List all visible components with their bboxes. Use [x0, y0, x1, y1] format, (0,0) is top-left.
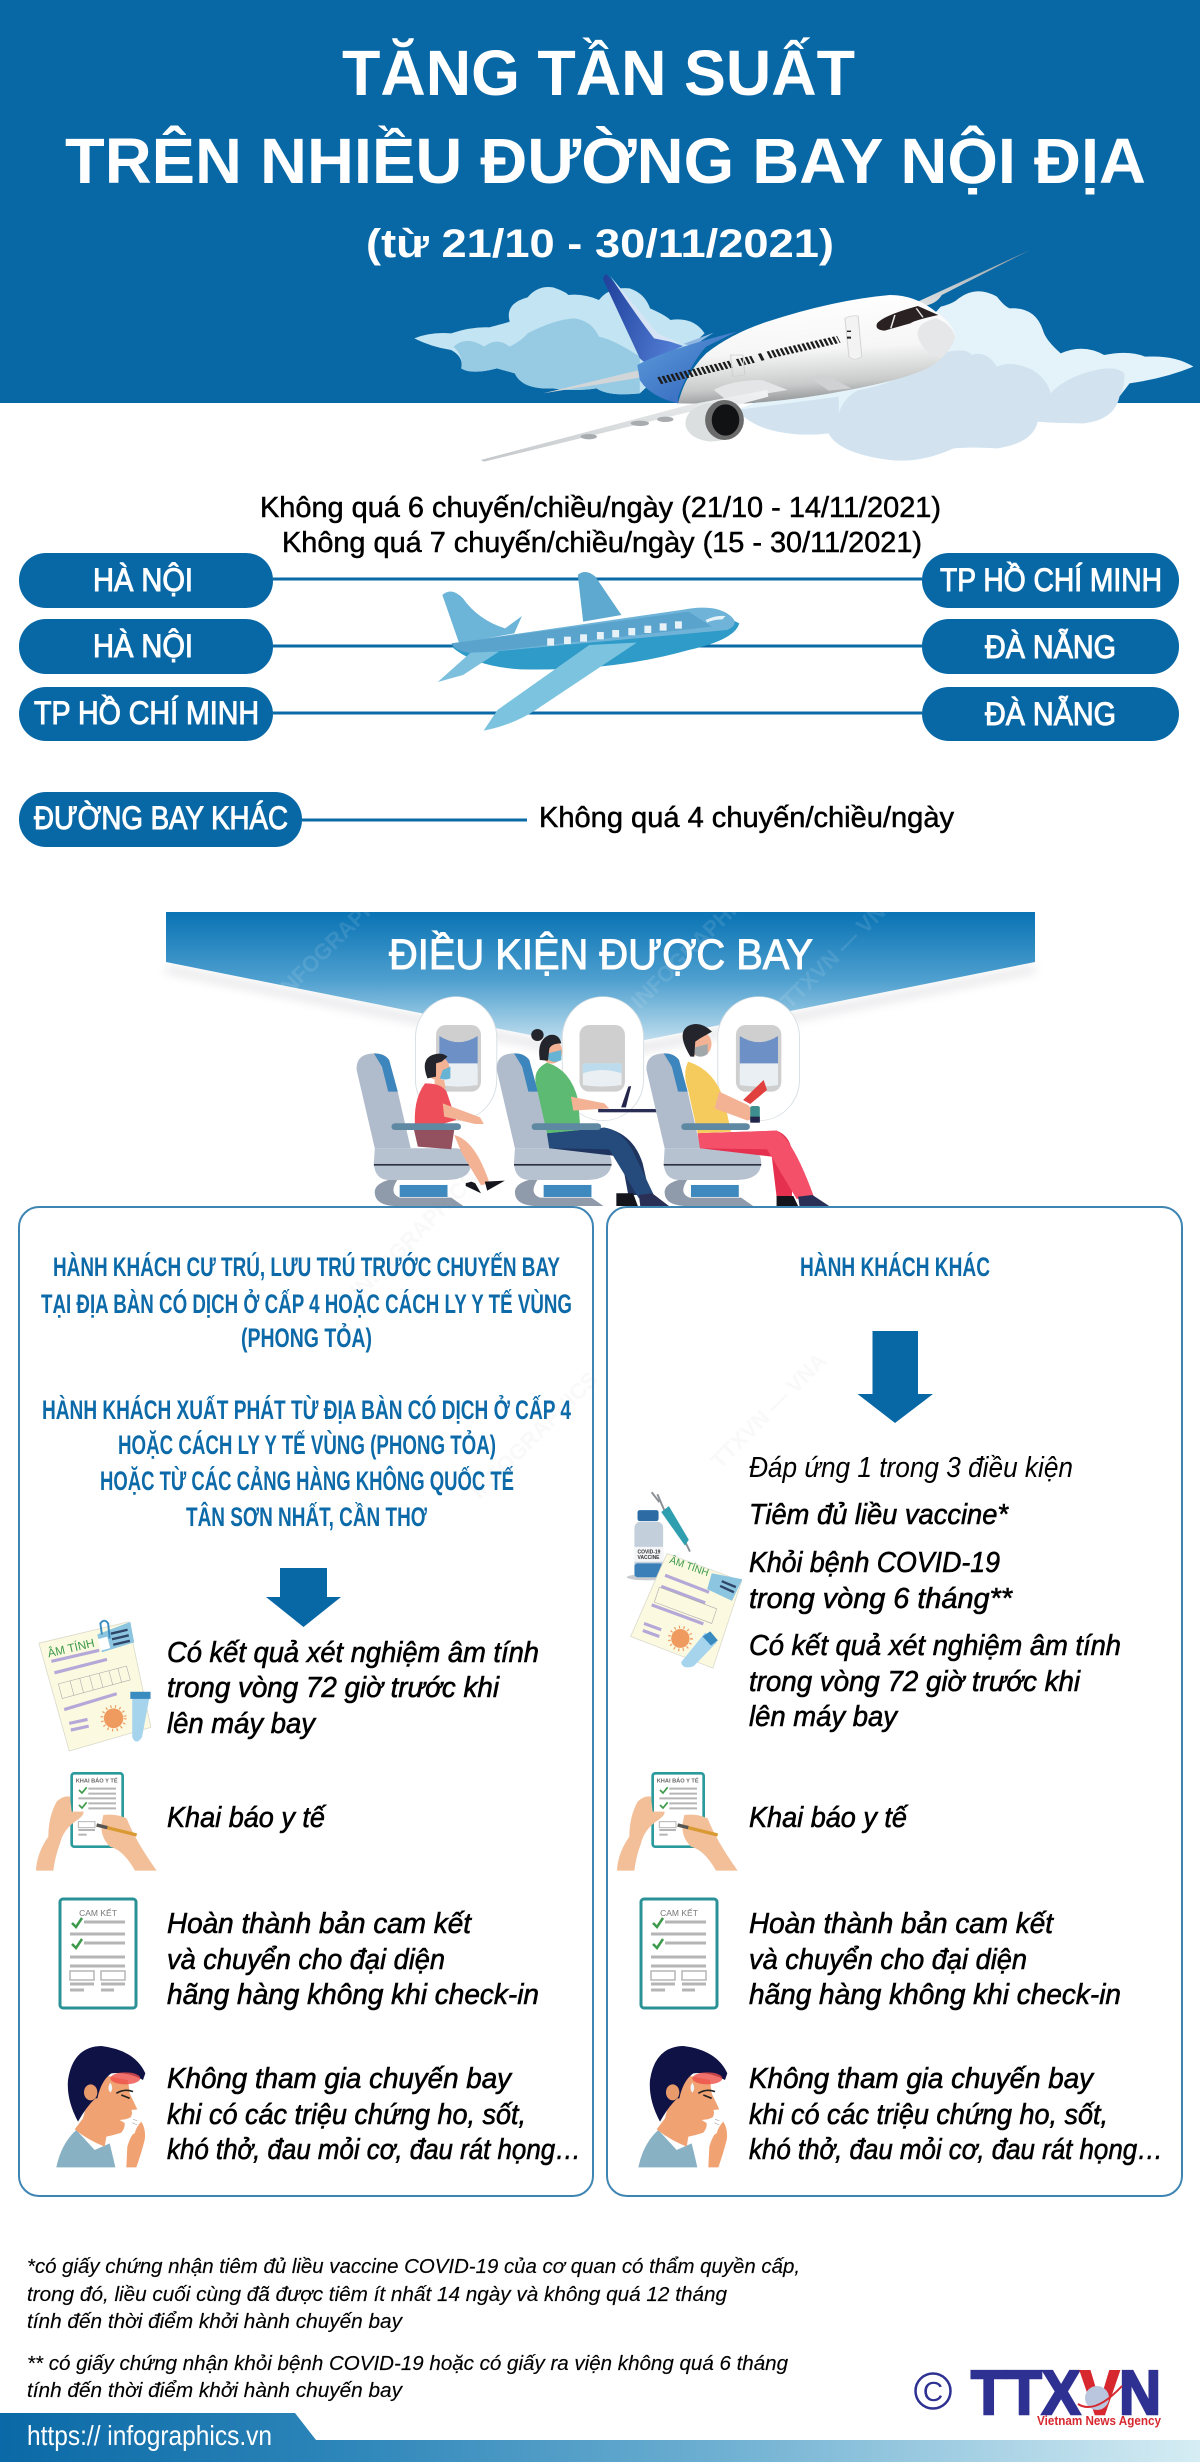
logo: TTXVN: TTXVN [971, 2359, 1161, 2428]
text: health declaration (left): Khai báo y tế [167, 1802, 327, 1834]
seat 2 and woman [497, 1029, 669, 1206]
footnotes: tính đến thời điểm khởi hành chuyến bay [27, 2310, 404, 2333]
left panel heading: HOẶC TỪ CÁC CẢNG HÀNG KHÔNG QUỐC TẾ [100, 1464, 514, 1496]
footnotes: trong đó, liều cuối cùng đã được tiêm ít nhất 14 ngày và không quá 12 tháng [27, 2283, 728, 2306]
windows [415, 997, 800, 1121]
route pills left: TP HỒ CHÍ MINH [34, 695, 259, 731]
footer band [0, 2413, 1200, 2462]
text: three conditions (right): trong vòng 6 tháng** [749, 1583, 1014, 1615]
route pills right: ĐÀ NẴNG [985, 629, 1116, 665]
route pills left: HÀ NỘI [93, 628, 193, 664]
text: commitment (left): Hoàn thành bản cam kết [167, 1908, 473, 1940]
text: health declaration (right): Khai báo y tế [749, 1802, 909, 1834]
footnotes: ** có giấy chứng nhận khỏi bệnh COVID-19 hoặc có giấy ra viện không quá 6 tháng [27, 2352, 789, 2375]
arrow: right panel [858, 1331, 933, 1423]
title: TRÊN NHIỀU ĐƯỜNG BAY NỘI ĐỊA [65, 124, 1146, 197]
left panel heading: TÂN SƠN NHẤT, CẦN THƠ [186, 1501, 427, 1532]
watermarks: TTXVN — VNA [776, 888, 902, 1014]
text: commitment (right) [749, 1908, 1121, 2011]
seat 3 and man [646, 1024, 829, 1206]
icon: main airplane [481, 250, 1030, 462]
text: symptoms (left) [167, 2063, 581, 2166]
panel watermarks [346, 1167, 832, 1504]
icon: commitment form (right) [641, 1899, 717, 2008]
watermarks: INFOGRAPHICS [626, 877, 763, 1014]
route pills right: ĐÀ NẴNG [985, 696, 1116, 732]
route pills left [19, 553, 273, 741]
left panel heading [41, 1251, 572, 1532]
text: commitment (left): và chuyển cho đại diện [167, 1944, 445, 1976]
text: three conditions (right): Đáp ứng 1 trong 3 điều kiện [749, 1452, 1073, 1484]
text: negative test (left): lên máy bay [167, 1708, 316, 1740]
route frequency text: Không quá 7 chuyến/chiều/ngày (15 - 30/11/2021) [282, 527, 922, 559]
text: negative test (left): trong vòng 72 giờ trước khi [167, 1672, 500, 1704]
banner: flight conditions [166, 912, 1035, 1049]
text: commitment (right): và chuyển cho đại diện [749, 1944, 1027, 1976]
left panel heading: HÀNH KHÁCH CƯ TRÚ, LƯU TRÚ TRƯỚC CHUYẾN BAY [53, 1251, 560, 1282]
logo: TTXVN: C [923, 2376, 943, 2407]
illustration: passengers in seats [357, 997, 829, 1206]
text: symptoms (left): khó thở, đau mỏi cơ, đau rát họng… [167, 2134, 581, 2166]
header band [0, 0, 1200, 403]
route pills right: TP HỒ CHÍ MINH [940, 562, 1162, 598]
icon: health declaration (left): KHAI BÁO Y TẾ [76, 1778, 118, 1785]
text: symptoms (left): Không tham gia chuyến bay [167, 2063, 512, 2095]
footnotes [27, 2255, 800, 2402]
other routes pill [19, 792, 302, 847]
panel watermarks: INFOGRAPHICS [466, 1367, 603, 1504]
left panel heading: (PHONG TỎA) [241, 1321, 372, 1353]
icon: coughing man (left) [56, 2046, 145, 2167]
right panel heading: HÀNH KHÁCH KHÁC [800, 1251, 990, 1282]
text: three conditions (right) [749, 1452, 1121, 1733]
icon: coughing man (right) [638, 2046, 727, 2167]
text: commitment (left): hãng hàng không khi check-in [167, 1979, 539, 2011]
watermarks [271, 867, 902, 1014]
panel watermarks: INFOGRAPHICS [346, 1167, 483, 1304]
watermarks: INFOGRAPHICS [271, 867, 408, 1004]
icon: vaccine and test document (right): VACCINE [638, 1555, 660, 1561]
clouds behind plane [414, 287, 1193, 461]
arrow: left panel [266, 1568, 341, 1627]
logo: TTXVN: Vietnam News Agency [1037, 2414, 1161, 2428]
other routes connector [302, 818, 527, 822]
text: three conditions (right): Tiêm đủ liều vaccine* [749, 1499, 1010, 1531]
panel watermarks: TTXVN — VNA [706, 1348, 832, 1474]
icon: health declaration (right) [617, 1773, 738, 1871]
text: symptoms (right) [749, 2063, 1163, 2166]
text: three conditions (right): Có kết quả xét nghiệm âm tính [749, 1630, 1121, 1662]
text: commitment (right): hãng hàng không khi check-in [749, 1979, 1121, 2011]
route pills right [922, 553, 1179, 741]
left panel heading: TẠI ĐỊA BÀN CÓ DỊCH Ở CẤP 4 HOẶC CÁCH LY Y TẾ VÙNG [41, 1287, 572, 1319]
icon: negative test document (left) [39, 1621, 151, 1751]
text: negative test (left): Có kết quả xét nghiệm âm tính [167, 1637, 539, 1669]
text: commitment (right): Hoàn thành bản cam kết [749, 1908, 1055, 1940]
route frequency text: Không quá 6 chuyến/chiều/ngày (21/10 - 14/11/2021) [260, 492, 941, 524]
text: symptoms (right): Không tham gia chuyến bay [749, 2063, 1094, 2095]
title [65, 37, 1146, 266]
icon: health declaration (left) [36, 1773, 157, 1871]
icon: commitment form (left): CAM KẾT [79, 1908, 117, 1918]
text: commitment (left) [167, 1908, 539, 2011]
text: symptoms (right): khi có các triệu chứng ho, sốt, [749, 2099, 1108, 2131]
icon: small blue airplane [438, 572, 739, 731]
text: symptoms (left): khi có các triệu chứng ho, sốt, [167, 2099, 526, 2131]
icon: health declaration (right): KHAI BÁO Y TẾ [657, 1778, 699, 1785]
title: (từ 21/10 - 30/11/2021) [366, 222, 834, 266]
other routes limit text: Không quá 4 chuyến/chiều/ngày [539, 802, 955, 834]
left panel heading: HOẶC CÁCH LY Y TẾ VÙNG (PHONG TỎA) [118, 1428, 496, 1460]
text: three conditions (right): Khỏi bệnh COVID-19 [749, 1547, 1000, 1579]
text: three conditions (right): trong vòng 72 giờ trước khi [749, 1666, 1081, 1698]
icon: commitment form (left) [60, 1899, 136, 2008]
route connector lines [273, 579, 922, 713]
seat 1 and child [357, 1053, 505, 1206]
footnotes: *có giấy chứng nhận tiêm đủ liều vaccine COVID-19 của cơ quan có thẩm quyền cấp, [27, 2255, 800, 2278]
footnotes: tính đến thời điểm khởi hành chuyến bay [27, 2379, 404, 2402]
icon: vaccine and test document (right) [627, 1492, 742, 1668]
icon: negative test document (left): ÂM TÍNH [46, 1637, 96, 1660]
footer url: https:// infographics.vn [27, 2420, 272, 2451]
banner shadow [166, 966, 1035, 1060]
icon: commitment form (right): CAM KẾT [660, 1908, 698, 1918]
route pills left: HÀ NỘI [93, 562, 193, 598]
panel: passengers from epidemic areas [19, 1207, 593, 2196]
icon: vaccine and test document (right): COVID-19 [638, 1549, 661, 1556]
icon: vaccine and test document (right): ÂM TÍNH [668, 1553, 711, 1579]
text: symptoms (right): khó thở, đau mỏi cơ, đau rát họng… [749, 2134, 1163, 2166]
left panel heading: HÀNH KHÁCH XUẤT PHÁT TỪ ĐỊA BÀN CÓ DỊCH Ở CẤP 4 [42, 1393, 571, 1425]
title: TĂNG TẦN SUẤT [342, 37, 855, 109]
text: negative test (left) [167, 1637, 539, 1740]
panel: other passengers [607, 1207, 1182, 2196]
other routes pill: ĐƯỜNG BAY KHÁC [34, 800, 288, 836]
text: three conditions (right): lên máy bay [749, 1701, 898, 1733]
banner: flight conditions: ĐIỀU KIỆN ĐƯỢC BAY [389, 931, 813, 979]
route frequency text [260, 492, 941, 559]
